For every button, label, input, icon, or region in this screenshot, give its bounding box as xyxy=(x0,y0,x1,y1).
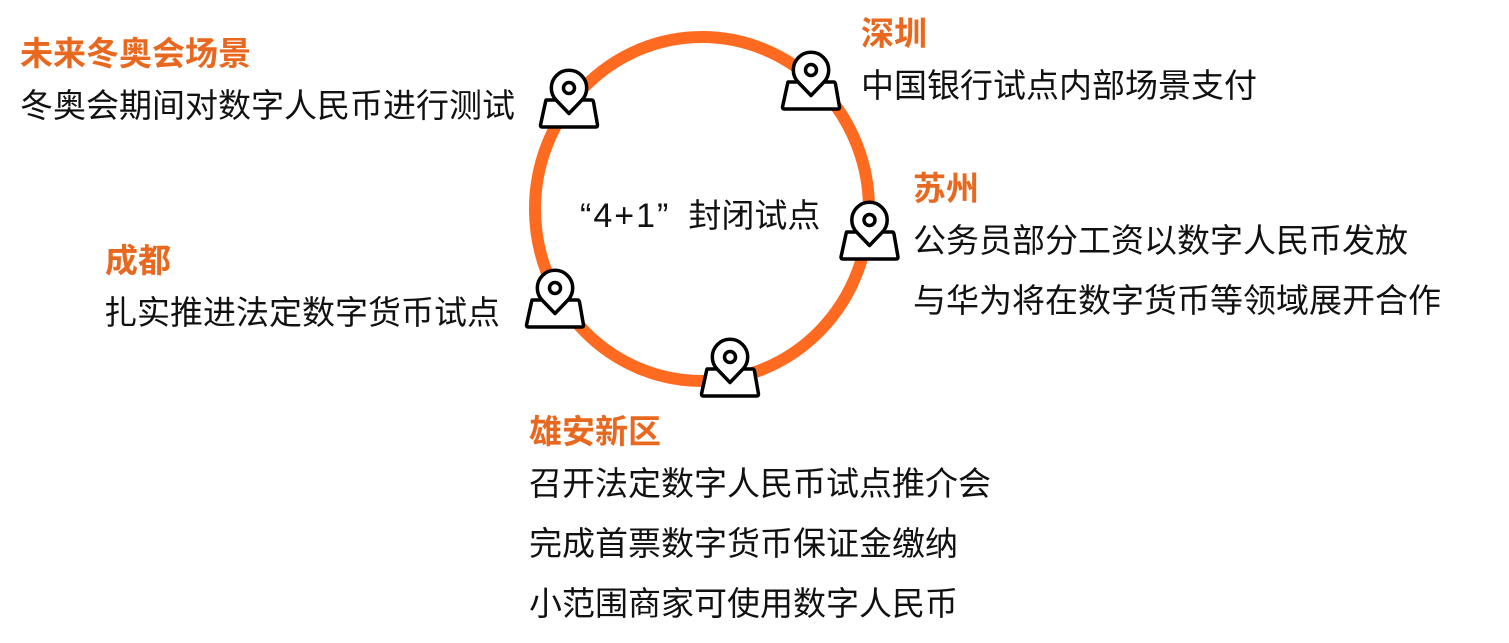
text: 成都 description: 扎实推进法定数字货币试点 xyxy=(104,294,500,331)
text: 雄安新区 line 2: 完成首票数字货币保证金缴纳 xyxy=(529,525,958,562)
icon: location pin 未来冬奥会 xyxy=(540,70,598,127)
icon: location pin 成都 xyxy=(526,270,584,327)
ring xyxy=(535,37,869,381)
heading: 深圳: 深圳 xyxy=(861,15,927,52)
text: 未来冬奥会场景 description: 冬奥会期间对数字人民币进行测试 xyxy=(20,87,515,124)
icon: location pin 苏州 xyxy=(841,202,898,259)
heading: 雄安新区: 雄安新区 xyxy=(529,413,661,450)
text: 苏州 line 2: 与华为将在数字货币等领域展开合作 xyxy=(913,282,1441,319)
text: 深圳 description: 中国银行试点内部场景支付 xyxy=(861,67,1257,104)
text: 雄安新区 line 1: 召开法定数字人民币试点推介会 xyxy=(529,465,991,502)
icon: location pin 雄安新区 xyxy=(702,339,758,396)
text: 雄安新区 line 3: 小范围商家可使用数字人民币 xyxy=(529,585,958,622)
heading: 苏州: 苏州 xyxy=(913,170,979,207)
text: 苏州 line 1: 公务员部分工资以数字人民币发放 xyxy=(913,222,1408,259)
heading: 未来冬奥会场景: 未来冬奥会场景 xyxy=(20,35,251,72)
center label: “4+1” 封闭试点 xyxy=(580,197,820,235)
heading: 成都: 成都 xyxy=(105,242,171,279)
icon: location pin 深圳 xyxy=(782,52,840,109)
